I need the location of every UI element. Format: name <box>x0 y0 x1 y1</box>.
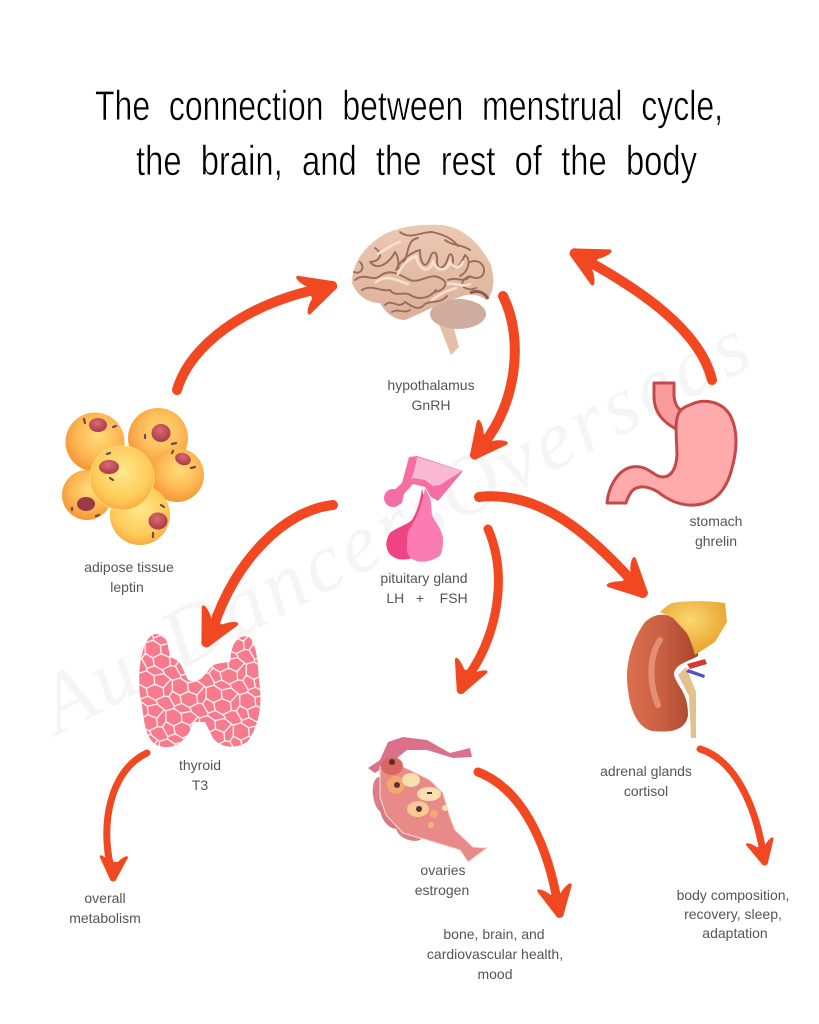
title <box>95 82 723 184</box>
label: body composition, recovery, sleep, adaptation: body composition, <box>677 887 789 903</box>
label: body composition, recovery, sleep, adaptation: adaptation <box>702 925 768 941</box>
label: pituitary gland: pituitary gland <box>380 570 468 586</box>
arrow: brain to pituitary gland <box>457 296 515 470</box>
icon: thyroid <box>139 634 260 747</box>
label: thyroid: thyroid <box>179 757 221 773</box>
label: adipose tissue: leptin <box>110 579 144 595</box>
arrow: adrenal glands to body composition <box>700 749 779 869</box>
icon: adipose tissue <box>62 408 204 545</box>
label: ovaries: estrogen <box>415 882 469 898</box>
label: adrenal glands: adrenal glands <box>600 763 692 779</box>
label: pituitary gland: LH + FSH <box>386 590 468 606</box>
label: thyroid: T3 <box>192 777 208 793</box>
label: hypothalamus: GnRH <box>412 397 450 413</box>
arrow: pituitary gland to ovaries <box>443 529 498 700</box>
arrow: adipose tissue to brain <box>177 265 343 390</box>
arrow: stomach to brain <box>561 233 712 380</box>
watermark: AusDancersOverseas <box>19 299 764 754</box>
label: hypothalamus: hypothalamus <box>387 377 475 393</box>
arrow: ovaries to bone, brain and cardiovascular health <box>478 772 578 921</box>
label: overall metabolism: metabolism <box>69 910 141 926</box>
icon: ovary <box>368 737 487 862</box>
label: body composition, recovery, sleep, adaptation: recovery, sleep, <box>684 906 782 922</box>
icon: brain <box>352 225 493 355</box>
icon: pituitary gland <box>384 456 463 562</box>
label: overall metabolism: overall <box>84 890 126 906</box>
label: bone, brain, cardiovascular health, mood: cardiovascular health, <box>427 946 563 962</box>
label: ovaries: ovaries <box>420 862 466 878</box>
label: adrenal glands: cortisol <box>624 783 668 799</box>
icon: kidney and adrenal gland <box>627 601 727 738</box>
label: adipose tissue: adipose tissue <box>84 559 174 575</box>
icon: stomach <box>607 383 736 505</box>
infographic canvas <box>54 90 788 979</box>
label: stomach: ghrelin <box>695 533 737 549</box>
label: bone, brain, cardiovascular health, mood: mood <box>477 966 513 982</box>
arrow: pituitary gland to thyroid <box>186 505 333 656</box>
arrow: thyroid to overall metabolism <box>99 753 147 882</box>
label: stomach: stomach <box>690 513 742 529</box>
arrow: pituitary gland to adrenal glands <box>479 496 660 611</box>
label: bone, brain, cardiovascular health, mood: bone, brain, and <box>443 926 545 942</box>
